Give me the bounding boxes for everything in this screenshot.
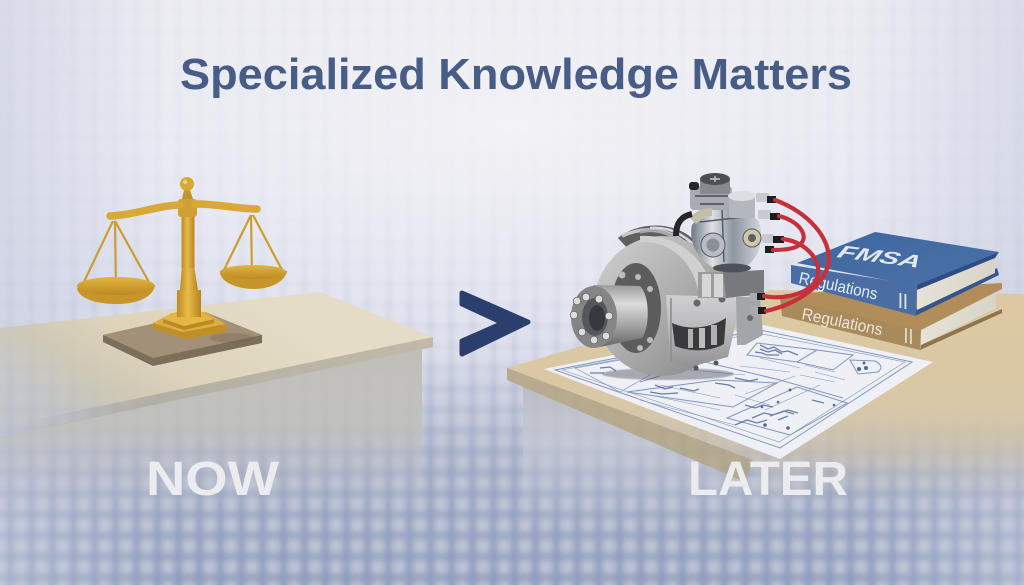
disc centre recess bbox=[611, 263, 661, 353]
contact shadow bbox=[602, 368, 734, 380]
arrow: greater-than sign bbox=[462, 293, 528, 354]
brake assembly bbox=[570, 173, 829, 380]
NOW label: NOW bbox=[146, 453, 280, 506]
fittings upper bbox=[756, 193, 784, 253]
books: FMSA regulations bbox=[780, 232, 1002, 350]
hub bolts bbox=[570, 293, 613, 344]
lower caliper bbox=[666, 295, 737, 370]
table front edge bbox=[0, 337, 433, 437]
blueprint dots bbox=[761, 362, 868, 430]
table top surface bbox=[507, 290, 1024, 515]
pump body bbox=[691, 208, 761, 272]
plinth bbox=[103, 312, 262, 366]
upper caliper housing bbox=[618, 225, 716, 300]
icon: scales of justice bbox=[77, 177, 287, 366]
lower pattern over tables bbox=[10, 514, 12, 516]
wheel hub cylinder bbox=[593, 285, 648, 347]
beam bbox=[110, 204, 257, 216]
tan book spine text: Regulations bbox=[800, 305, 884, 339]
table body bbox=[0, 349, 422, 585]
left pan strings bbox=[81, 221, 150, 292]
tan book bbox=[780, 283, 1002, 350]
red hydraulic hoses bbox=[764, 200, 829, 311]
blueprint sheet bbox=[544, 325, 933, 459]
disc shoulder bbox=[640, 236, 710, 290]
table front edge bbox=[507, 368, 753, 482]
right pan bbox=[220, 265, 287, 289]
title: Specialized Knowledge Matters bbox=[180, 50, 852, 99]
fittings lower bbox=[750, 293, 766, 314]
brake disc bbox=[594, 236, 730, 376]
shadow under scales bbox=[210, 333, 254, 343]
pump top assembly bbox=[689, 173, 756, 224]
blueprint borders bbox=[555, 330, 912, 448]
table body bbox=[523, 386, 790, 585]
panel: right table bbox=[507, 290, 1024, 585]
column bbox=[177, 177, 201, 317]
blue book bbox=[791, 232, 999, 316]
FMSA cover text: FMSA bbox=[834, 242, 925, 272]
black ring linkage bbox=[676, 214, 692, 236]
caliper bridge block bbox=[698, 270, 764, 345]
LATER label: LATER bbox=[688, 453, 848, 506]
table top surface bbox=[0, 292, 433, 427]
stepped gold base bbox=[153, 311, 226, 339]
blueprint drawings bbox=[590, 345, 824, 425]
left pan bbox=[77, 277, 155, 304]
panel: left table bbox=[0, 292, 433, 585]
blue book spine text: Regulations bbox=[797, 269, 879, 304]
right pan strings bbox=[223, 215, 282, 278]
recess bolts bbox=[618, 272, 653, 351]
hub face bbox=[571, 286, 617, 348]
